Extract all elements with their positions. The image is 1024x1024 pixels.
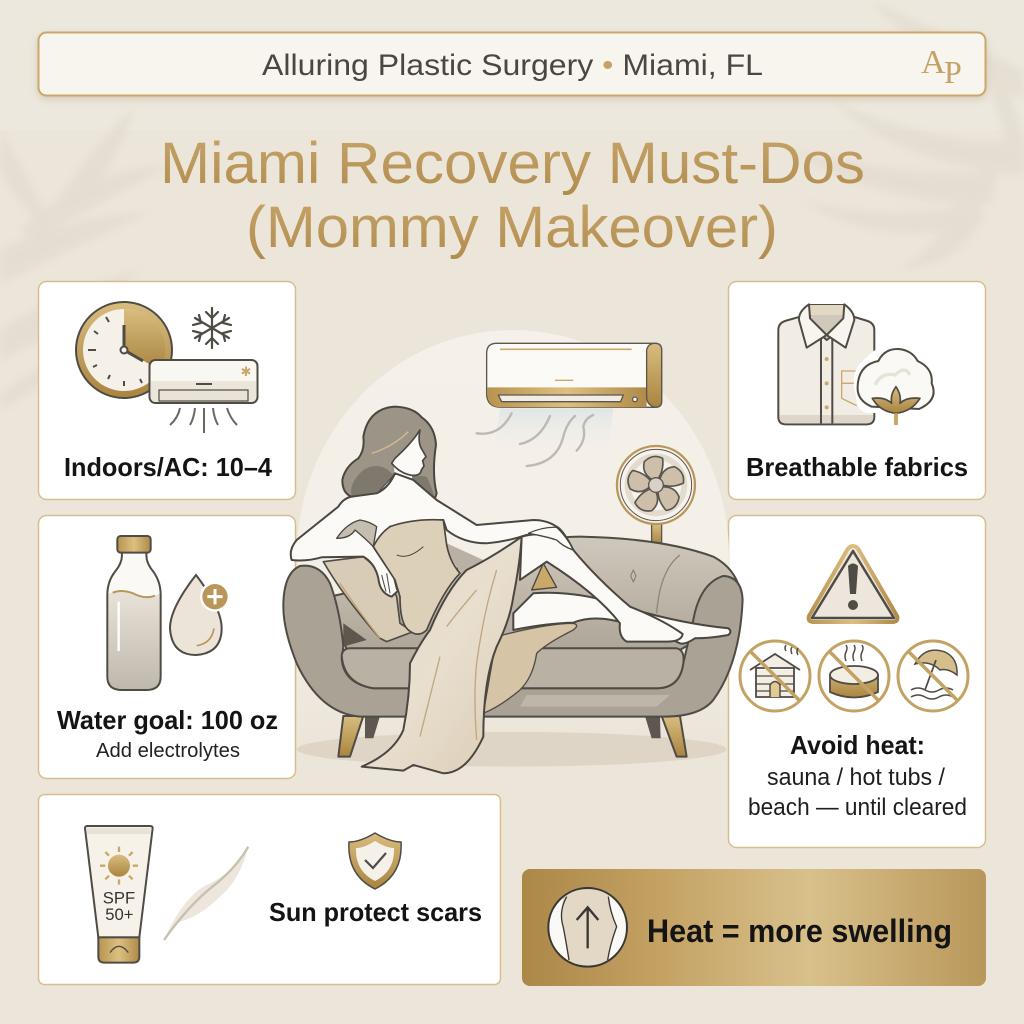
icon: feather (164, 847, 248, 940)
icon: no beach (898, 641, 968, 711)
panel: indoors / AC (38, 282, 296, 500)
long drape (362, 537, 522, 773)
panel: avoid heat (728, 516, 986, 848)
label: Breathable fabrics (746, 452, 968, 482)
hand (528, 527, 573, 550)
callout: heat = more swelling (522, 869, 986, 986)
torso and arms (291, 473, 573, 597)
icon: droplet with plus (170, 575, 230, 655)
icon: swelling (548, 887, 627, 968)
label: Water goal: 100 oz (57, 705, 278, 735)
icon: shirt (778, 304, 874, 424)
arch backdrop (297, 330, 729, 736)
sofa (283, 537, 743, 757)
icon: water bottle (107, 536, 161, 690)
logo monogram: P (944, 54, 962, 90)
header text: Alluring Plastic Surgery • Miami, FL (262, 49, 763, 82)
air swirls (477, 413, 593, 466)
icon: no hot tub (819, 641, 889, 711)
face (392, 430, 426, 475)
pillow (323, 557, 413, 642)
icon: cotton (857, 348, 934, 425)
icon: snowflake (193, 308, 231, 348)
neck (393, 462, 413, 488)
title: Miami Recovery Must-Dos (160, 131, 865, 196)
icon: small air conditioner (150, 360, 258, 433)
icon: sunscreen tube (85, 826, 153, 963)
standing fan (617, 446, 695, 544)
title (160, 131, 865, 260)
icon: warning triangle (809, 546, 897, 622)
icon: sunscreen tube: 50+ (105, 905, 133, 924)
icon: small air conditioner: ✱ (241, 364, 252, 379)
woman (291, 407, 730, 773)
panel: breathable fabrics (728, 282, 986, 500)
title: (Mommy Makeover) (246, 195, 778, 260)
central illustration (283, 343, 743, 773)
upper leg (520, 534, 683, 642)
dress (373, 520, 460, 634)
logo monogram (921, 44, 962, 90)
icon: no sauna (740, 641, 810, 711)
icon: sunscreen tube: SPF (103, 889, 135, 908)
floor shadow (297, 732, 727, 767)
label: Sun protect scars (269, 897, 482, 927)
label: Avoid heat: (790, 730, 925, 760)
header bar (38, 32, 986, 96)
seat drape (483, 623, 577, 713)
panel: avoid heat: beach — until cleared (748, 794, 967, 821)
air conditioner (487, 343, 662, 453)
logo monogram: A (921, 44, 946, 81)
panel: sun protect scars (38, 794, 500, 984)
lower leg (513, 593, 730, 644)
sublabel: Add electrolytes (96, 740, 240, 762)
panel: water goal (38, 516, 296, 778)
icon: clock (76, 302, 172, 398)
hair (342, 407, 437, 498)
label: Heat = more swelling (647, 913, 952, 949)
icon: shield with check (349, 833, 401, 889)
body text: sauna / hot tubs / (767, 764, 945, 791)
label: Indoors/AC: 10–4 (64, 452, 273, 482)
